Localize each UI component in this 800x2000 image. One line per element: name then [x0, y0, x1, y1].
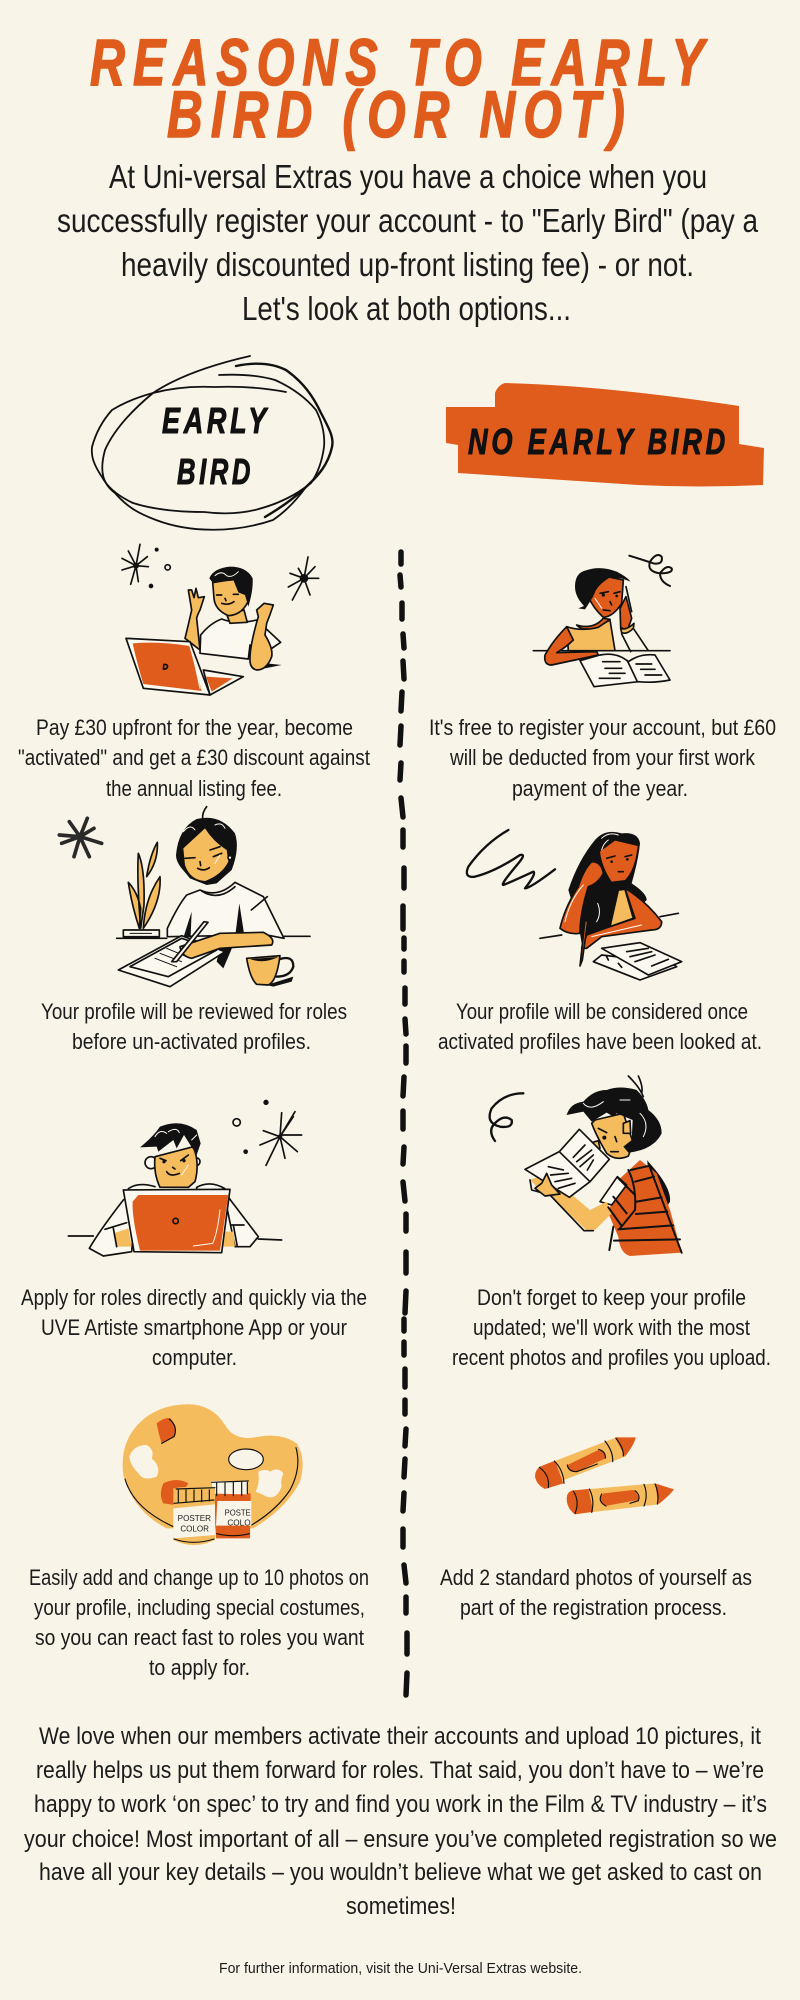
row 2 right text	[438, 999, 762, 1054]
icon: two orange crayons	[535, 1437, 674, 1514]
row 4 left text: to apply for.	[149, 1655, 250, 1680]
row 1 left text	[18, 715, 371, 801]
heading: early bird in hand-drawn circle: EARLY	[162, 400, 270, 441]
row 4 left text	[29, 1565, 369, 1680]
closing paragraph	[24, 1723, 777, 1920]
heading: early bird in hand-drawn circle: BIRD	[177, 451, 254, 492]
heading: no early bird on orange brush stroke	[446, 383, 764, 486]
row 1 right text: will be deducted from your first work	[449, 745, 756, 770]
row 4 right text	[440, 1565, 752, 1620]
row 3 right text: Don't forget to keep your profile	[477, 1285, 746, 1310]
title: BIRD (OR NOT)	[167, 77, 633, 151]
icon: paint palette with poster colour bottles: COLOR	[180, 1524, 209, 1534]
intro paragraph: heavily discounted up-front listing fee) - or not.	[121, 246, 694, 283]
title	[90, 25, 712, 151]
row 3 left text: computer.	[152, 1345, 237, 1370]
icon: paint palette with poster colour bottles: POSTE	[225, 1508, 251, 1518]
icon: girl reading a book on the phone	[533, 555, 672, 687]
footer note: For further information, visit the Uni-Versal Extras website.	[219, 1960, 582, 1977]
icon: paint palette with poster colour bottles: POSTER	[178, 1513, 211, 1523]
icon: boy waving behind laptop	[122, 544, 319, 695]
icon: girl writing on tablet with plant and cup	[59, 807, 310, 987]
icon: paint palette with poster colour bottles	[123, 1404, 303, 1545]
row 1 left text: Pay £30 upfront for the year, become	[36, 715, 353, 740]
icon: paint palette with poster colour bottles: COLO	[227, 1518, 251, 1528]
row 3 right text	[452, 1285, 771, 1370]
row 2 left text	[41, 999, 347, 1054]
row 3 right text: updated; we'll work with the most	[473, 1315, 751, 1340]
row 3 left text: UVE Artiste smartphone App or your	[41, 1315, 347, 1340]
row 1 left text: the annual listing fee.	[106, 776, 282, 801]
icon: long-haired girl thinking with papers	[467, 830, 682, 980]
dashed divider between columns	[400, 552, 407, 1695]
row 4 left text: Easily add and change up to 10 photos on	[29, 1565, 369, 1590]
row 3 left text	[21, 1285, 367, 1370]
row 1 left text: "activated" and get a £30 discount against	[18, 745, 371, 770]
row 4 right text: Add 2 standard photos of yourself as	[440, 1565, 752, 1590]
icon: boy behind orange laptop	[68, 1100, 302, 1256]
row 1 right text: payment of the year.	[512, 776, 688, 801]
row 2 left text: Your profile will be reviewed for roles	[41, 999, 347, 1024]
heading: early bird in hand-drawn circle	[92, 356, 333, 530]
row 4 left text: so you can react fast to roles you want	[35, 1625, 365, 1650]
row 2 left text: before un-activated profiles.	[72, 1029, 311, 1054]
row 4 left text: your profile, including special costumes,	[34, 1595, 365, 1620]
row 4 right text: part of the registration process.	[460, 1595, 727, 1620]
intro paragraph	[57, 158, 759, 327]
row 1 right text	[429, 715, 776, 801]
icon: curly-haired person reading book	[490, 1076, 682, 1256]
intro paragraph: Let's look at both options...	[242, 290, 571, 327]
row 2 right text: Your profile will be considered once	[456, 999, 748, 1024]
closing paragraph: sometimes!	[346, 1893, 456, 1920]
row 3 left text: Apply for roles directly and quickly via the	[21, 1285, 367, 1310]
